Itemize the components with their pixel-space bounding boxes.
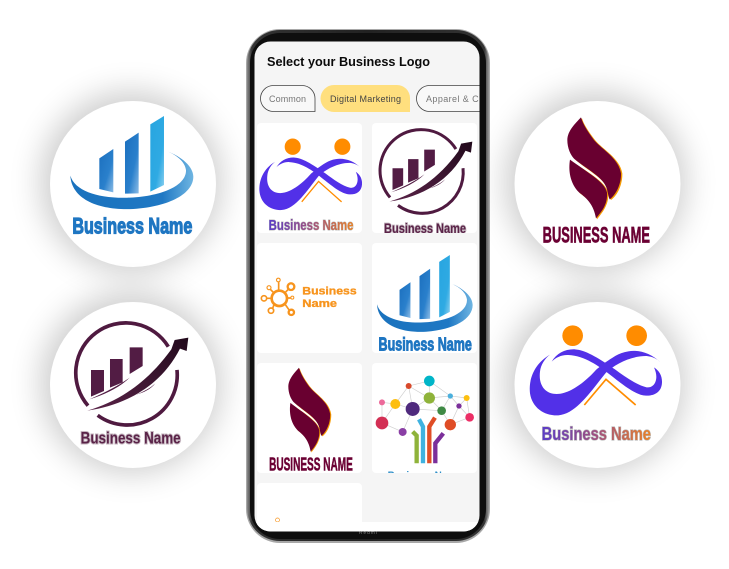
card: orange network logo xyxy=(257,243,362,353)
panel: blue bar chart logo circle xyxy=(41,92,221,272)
logo: blue bars: Business Name xyxy=(72,213,192,238)
card: orange network logo: Name xyxy=(302,298,337,310)
tree trunks xyxy=(413,418,443,463)
logo: blue bars xyxy=(70,116,193,238)
tab: Apparel and Clothing xyxy=(416,85,480,112)
tab: Common xyxy=(260,86,315,112)
card: colourful tree logo: Business Name xyxy=(388,470,462,482)
card: orange network logo: Business xyxy=(302,285,357,297)
phone mockup xyxy=(246,29,508,543)
phone brand mark: Redmi xyxy=(359,530,377,535)
tab: Digital Marketing xyxy=(320,85,410,112)
card: maroon chart logo: Business Name xyxy=(384,221,466,236)
card: colourful tree logo xyxy=(372,363,477,482)
logo: maroon chart xyxy=(76,323,188,447)
panel: flame logo circle xyxy=(506,92,686,272)
network nodes xyxy=(376,376,474,436)
logo: maroon chart: Business Name xyxy=(81,429,181,447)
card: blue bars logo: Business Name xyxy=(379,334,472,355)
screen xyxy=(254,42,480,532)
card: flame logo: BUSINESS NAME xyxy=(269,454,353,475)
heading: Select your Business Logo xyxy=(267,54,430,69)
card: infinity logo xyxy=(257,123,362,234)
tab: Digital Marketing: Digital Marketing xyxy=(330,94,401,104)
panel: infinity logo circle xyxy=(506,293,686,473)
card: maroon chart logo xyxy=(372,123,477,236)
card: blue bars logo xyxy=(372,243,477,355)
logo: infinity: Business Name xyxy=(542,423,651,444)
phone body xyxy=(246,29,490,543)
tab: Common: Common xyxy=(269,94,306,104)
network links xyxy=(382,381,470,432)
bottom bar xyxy=(254,522,480,532)
logo: flame: BUSINESS NAME xyxy=(543,223,650,248)
card: partial logo xyxy=(257,483,362,528)
panel: maroon chart logo circle xyxy=(41,293,221,473)
card: flame logo xyxy=(257,363,362,475)
logo: infinity xyxy=(530,325,662,444)
tab: Apparel and Clothing: Apparel & Clothing xyxy=(426,94,508,104)
card: infinity logo: Business Name xyxy=(269,218,353,234)
logo: flame xyxy=(543,117,650,248)
